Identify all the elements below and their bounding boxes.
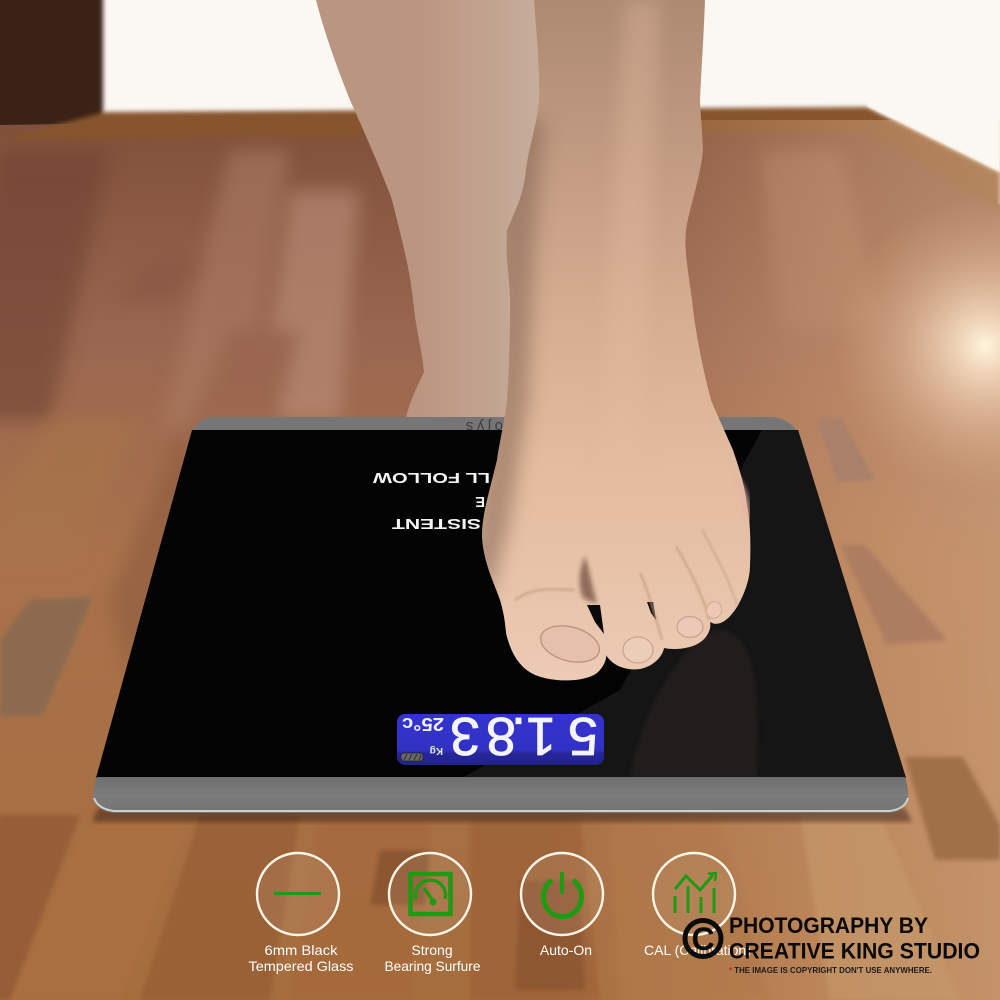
toe gaps — [580, 556, 597, 604]
scale glass reflection — [462, 430, 906, 778]
scale shadow — [92, 808, 912, 822]
label: calibration: CAL (Calibration) — [644, 942, 751, 958]
LCD temperature: 25°c — [402, 714, 444, 734]
icon: trend chart — [675, 873, 716, 913]
background: room wall — [0, 0, 1000, 180]
feature icon row — [248, 853, 751, 974]
label: glass: 6mm Black — [264, 942, 339, 958]
icon: glass line — [274, 892, 321, 895]
label: bearing: Strong — [411, 942, 453, 958]
copyright symbol — [685, 920, 721, 957]
front leg and foot — [470, 0, 750, 680]
toe nails — [537, 620, 603, 668]
icon: power — [544, 872, 582, 917]
upside-down slogan: LL FOLLOW — [373, 469, 490, 485]
icon: gauge — [410, 874, 450, 914]
scale top brand: ojys — [462, 418, 503, 435]
LCD display — [397, 706, 604, 766]
skirting board — [0, 107, 1000, 212]
upside-down slogan — [373, 469, 490, 531]
feature: tempered glass — [248, 853, 354, 974]
watermark: CREATIVE KING STUDIO — [729, 938, 980, 964]
toe knuckles — [515, 589, 575, 600]
LCD unit: Kg — [430, 745, 443, 756]
foot shading — [470, 0, 660, 600]
feature: auto-on — [521, 853, 603, 958]
scale glass — [96, 430, 906, 778]
feature: calibration — [644, 853, 751, 958]
scale bottom band — [93, 777, 908, 813]
dark planks — [0, 418, 1000, 860]
feature: tempered glass: Tempered Glass — [248, 958, 354, 974]
watermark note: * THE IMAGE IS COPYRIGHT DON'T USE ANYWHERE. — [729, 965, 932, 975]
watermark title: PHOTOGRAPHY BY — [729, 913, 928, 938]
scale top band — [192, 417, 797, 432]
upside-down slogan: SISTENT — [392, 515, 481, 531]
bathroom scale — [92, 417, 912, 822]
LCD battery icon — [401, 753, 423, 761]
back leg — [316, 0, 545, 418]
feature: bearing surface — [384, 853, 481, 974]
watermark — [685, 913, 980, 975]
copyright symbol: C — [691, 921, 715, 957]
background: right wall — [867, 0, 1000, 172]
feature: bearing surface: Bearing Surfure — [384, 958, 481, 974]
LCD weight reading: 51.83 — [450, 706, 598, 766]
label: auto-on: Auto-On — [540, 942, 592, 958]
upside-down slogan: E — [475, 493, 485, 509]
foot reflection — [630, 630, 758, 778]
